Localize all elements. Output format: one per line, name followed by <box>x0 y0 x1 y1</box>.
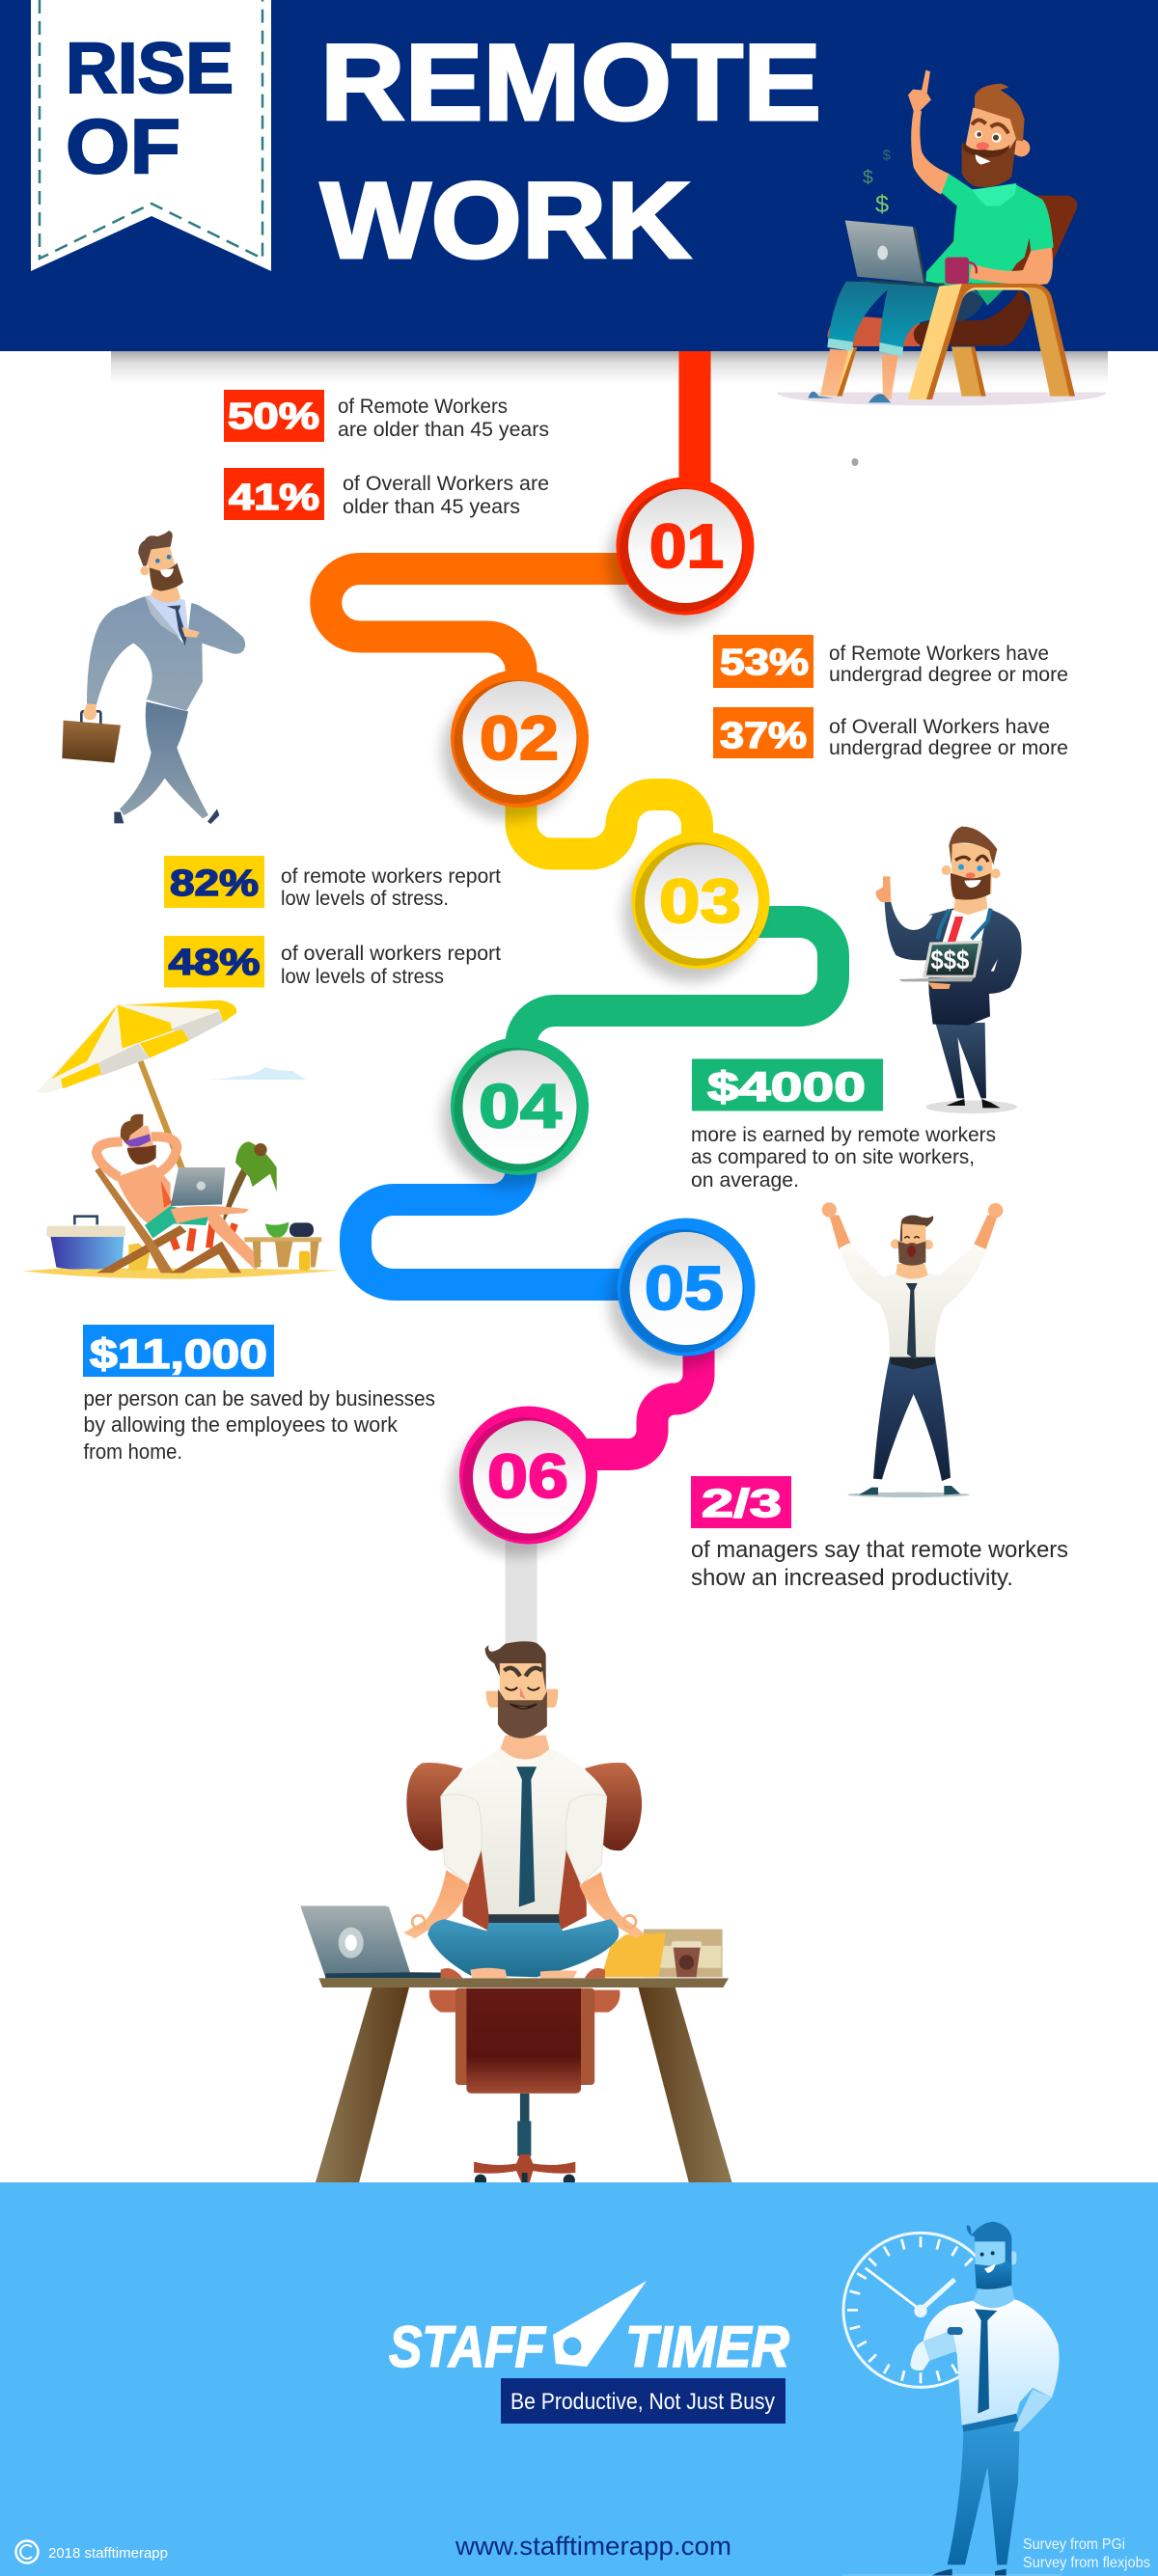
path: blue <box>355 1158 637 1285</box>
text: managers: of managers say that remote workers <box>691 1537 1068 1563</box>
stat block: degree <box>713 635 1068 759</box>
step 04 <box>442 1037 589 1188</box>
text: remote workers age: of Remote Workers <box>338 396 508 418</box>
illustration: cheering man <box>822 1202 1003 1497</box>
step 05 <box>609 1218 755 1369</box>
step 03 <box>623 832 770 982</box>
illustration: meditating man at desk <box>300 1641 732 2186</box>
text: overall workers age <box>343 473 549 518</box>
stat block: age <box>224 390 549 520</box>
logo: staff timer: TIMER <box>625 2315 789 2379</box>
ribbon: rise of: OF <box>66 103 180 189</box>
illustration: businessman with laptop: $$$ <box>930 945 969 975</box>
step 04: 04 <box>479 1071 562 1140</box>
text: savings: from home. <box>83 1439 182 1464</box>
title <box>320 22 821 281</box>
illustration: man with laptop on chair <box>777 70 1107 405</box>
website url: www.stafftimerapp.com <box>455 2532 731 2561</box>
text: remote workers degree <box>829 643 1068 686</box>
text: remote stress: low levels of stress. <box>281 888 449 910</box>
step 02: 02 <box>480 703 559 773</box>
step 03: 03 <box>659 866 741 936</box>
stat: $4000: $4000 <box>707 1064 866 1110</box>
copyright: 2018 stafftimerapp <box>48 2545 168 2562</box>
stat: $11,000 <box>83 1325 274 1378</box>
stat: 53%: 53% <box>720 643 809 683</box>
stat: 82%: 82% <box>170 863 259 904</box>
text: earnings: as compared to on site workers, <box>691 1146 975 1168</box>
step 01: 01 <box>649 511 724 581</box>
stat: 41%: 41% <box>229 478 319 518</box>
illustration: man with laptop on chair: $ <box>883 148 891 163</box>
stat block: earnings <box>691 1059 996 1192</box>
path: green <box>521 922 834 1061</box>
stat block: productivity <box>691 1476 1068 1591</box>
tagline <box>501 2378 786 2424</box>
step 05: 05 <box>645 1253 724 1323</box>
header band <box>0 0 1158 351</box>
path: grey to desk <box>506 1534 537 1669</box>
stat: 2/3 <box>691 1476 791 1528</box>
stat: 37% <box>713 707 813 758</box>
text: earnings: more is earned by remote workers <box>691 1124 996 1146</box>
logo: staff timer <box>389 2281 789 2379</box>
tagline: Be Productive, Not Just Busy <box>510 2389 775 2415</box>
clock <box>843 2233 998 2387</box>
illustration: man with laptop on chair: $ <box>863 168 873 188</box>
stat: 50% <box>224 390 324 442</box>
text: earnings <box>691 1124 996 1192</box>
text: overall stress <box>281 943 501 988</box>
text: overall workers degree: of Overall Workers have <box>829 716 1050 738</box>
text: overall workers age: of Overall Workers are <box>343 473 549 495</box>
header shadow <box>111 351 1108 384</box>
icon: clock hand mark <box>553 2281 647 2367</box>
stat: 2/3: 2/3 <box>702 1481 782 1525</box>
text: remote workers degree: of Remote Workers have <box>829 643 1049 665</box>
stat: 48%: 48% <box>168 943 261 983</box>
stat block: stress <box>164 856 501 988</box>
copyright <box>15 2541 168 2562</box>
clock and man illustration <box>842 2222 1062 2576</box>
ribbon: rise of: RISE <box>66 28 234 108</box>
text: earnings: on average. <box>691 1169 799 1192</box>
footer band <box>0 2182 1158 2576</box>
stat: $11,000: $11,000 <box>90 1331 267 1378</box>
man in monochrome blue <box>842 2222 1062 2576</box>
ribbon: rise of <box>31 0 271 271</box>
text: overall workers age: older than 45 years <box>343 496 520 518</box>
stat block: savings <box>83 1325 435 1464</box>
text: overall stress: low levels of stress <box>281 966 444 988</box>
text: remote workers age <box>338 396 549 441</box>
text: savings: by allowing the employees to work <box>83 1412 399 1437</box>
title: REMOTE <box>320 22 821 143</box>
path: orange <box>326 569 627 714</box>
text: overall stress: of overall workers report <box>281 943 501 965</box>
text: remote stress <box>281 865 501 910</box>
survey sources: Survey from PGi <box>1023 2536 1125 2553</box>
step 06 <box>451 1407 597 1556</box>
title: WORK <box>320 160 691 281</box>
survey sources <box>1023 2536 1150 2571</box>
stat: 37%: 37% <box>720 716 807 756</box>
timeline paths <box>326 351 834 1669</box>
text: overall workers degree: undergrad degree or more <box>829 737 1068 759</box>
text: remote stress: of remote workers report <box>281 865 501 888</box>
stat: 53% <box>713 635 813 688</box>
illustration: man with laptop on chair: $ <box>875 191 889 218</box>
stat: 82% <box>164 856 264 908</box>
text: remote workers age: are older than 45 years <box>338 419 549 441</box>
path: pink <box>569 1346 699 1455</box>
path: red <box>679 351 710 502</box>
path: yellow <box>521 791 697 859</box>
text: overall workers degree <box>829 716 1068 759</box>
step 02 <box>442 670 589 820</box>
text: savings: per person can be saved by businesses <box>83 1386 435 1411</box>
illustration: businessman with laptop <box>876 827 1022 1113</box>
text: remote workers degree: undergrad degree or more <box>829 664 1068 686</box>
stat: 41% <box>224 468 324 520</box>
text: managers: show an increased productivity. <box>691 1565 1013 1591</box>
stat: $4000 <box>692 1059 883 1111</box>
step 01 <box>608 477 755 627</box>
text: savings <box>83 1386 435 1464</box>
text: managers <box>691 1537 1068 1591</box>
stat: 48% <box>164 936 264 988</box>
illustration: walking businessman <box>62 531 245 824</box>
illustration: beach worker <box>23 1000 340 1279</box>
step 06: 06 <box>487 1441 568 1511</box>
stat: 50%: 50% <box>228 397 319 437</box>
logo: staff timer: STAFF <box>389 2315 546 2379</box>
grey dot <box>851 458 859 466</box>
